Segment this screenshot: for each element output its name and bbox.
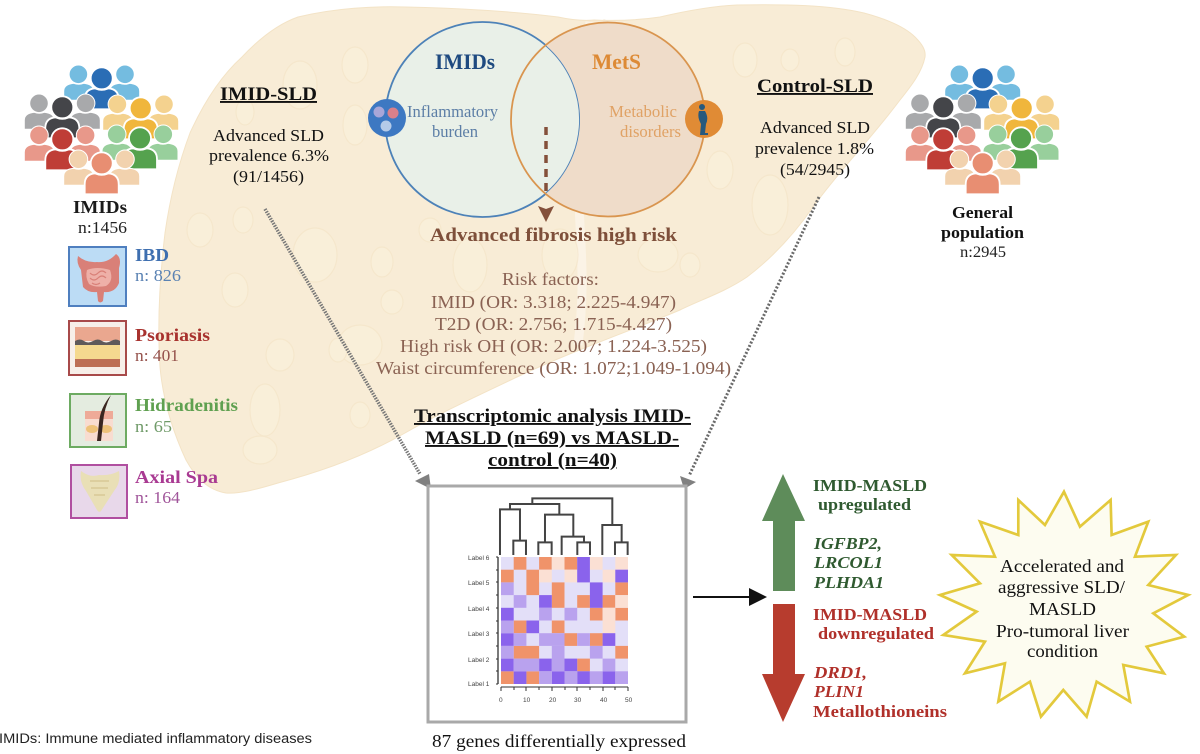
arrow: heatmap to gene regulation — [693, 588, 767, 606]
text: metabolic disorders: disorders — [620, 122, 681, 141]
arrow: upregulated — [762, 474, 805, 591]
text: conclusion: MASLD — [1029, 599, 1096, 619]
text: conclusion: aggressive SLD/ — [998, 577, 1125, 597]
text block: IMID-SLD — [209, 84, 329, 186]
chart: axis labels: Label 1 — [468, 681, 490, 688]
text block: Control-SLD: (54/2945) — [780, 160, 850, 179]
text block: IMID-SLD: (91/1456) — [233, 167, 304, 186]
text: inflammatory burden — [407, 102, 498, 141]
text block: Control-SLD: Advanced SLD — [760, 118, 870, 137]
text: metabolic disorders — [609, 102, 681, 141]
text block: IMID-SLD: IMID-SLD — [220, 84, 317, 105]
chart: axes — [496, 557, 628, 691]
icon: skin layers — [69, 321, 126, 375]
label: IMIDs count: IMIDs — [73, 197, 127, 217]
text: downregulated genes: downregulated — [818, 624, 935, 643]
text: conclusion: Pro-tumoral liver — [996, 621, 1129, 641]
text: downregulated genes: IMID-MASLD — [813, 605, 927, 624]
venn diagram — [368, 22, 723, 222]
arrow: IMID-SLD to heatmap — [265, 209, 431, 489]
chart: axis labels — [468, 555, 633, 704]
panel: Axial Spa — [71, 465, 218, 518]
liver background — [159, 5, 925, 493]
text: conclusion: condition — [1027, 641, 1098, 661]
text: upregulated genes: IMID-MASLD — [813, 476, 927, 495]
text block: risk factors — [376, 269, 731, 379]
chart: axis labels: Label 3 — [468, 631, 490, 638]
callout: star conclusion — [940, 492, 1188, 717]
text block: risk factors: High risk OH (OR: 2.007; 1.224-3.525) — [400, 336, 707, 357]
label: IMIDs count: n:1456 — [78, 218, 127, 237]
chart: axis labels: 20 — [549, 697, 557, 704]
text: metabolic disorders: Metabolic — [609, 102, 677, 121]
heading: transcriptomic analysis: control (n=40) — [488, 450, 617, 471]
arrow: Control-SLD to heatmap — [680, 197, 819, 489]
text block: IMID-SLD: Advanced SLD — [213, 126, 324, 145]
label: general population count: n:2945 — [960, 244, 1006, 261]
circle: IMIDs — [385, 22, 580, 217]
people group: IMIDs — [24, 65, 179, 194]
panel: Axial Spa: n: 164 — [135, 488, 181, 507]
panel: IBD — [69, 245, 181, 306]
chart: axis labels: 10 — [523, 697, 531, 704]
caption: genes differentially expressed: 87 genes differentially expressed — [432, 731, 686, 751]
chart: axis labels: 0 — [499, 697, 503, 704]
chart: axis labels: Label 5 — [468, 580, 490, 587]
text: upregulated genes: upregulated — [818, 495, 912, 514]
chart: axis labels: 50 — [625, 697, 633, 704]
text: inflammatory burden: Inflammatory — [407, 102, 498, 121]
people group: general population — [905, 65, 1060, 194]
panel: Hidradenitis — [70, 394, 238, 447]
heading: advanced fibrosis high risk: Advanced fibrosis high risk — [430, 225, 677, 246]
text: conclusion — [996, 556, 1129, 661]
text: downregulated genes: DRD1, — [813, 663, 867, 682]
text: upregulated genes: IGFBP2, — [813, 534, 882, 553]
label: general population count — [941, 203, 1025, 261]
text block: risk factors: Waist circumference (OR: 1.072;1.049-1.094) — [376, 358, 731, 379]
text: upregulated genes — [813, 476, 927, 592]
chart: dendrogram — [500, 498, 628, 555]
heading: transcriptomic analysis: MASLD (n=69) vs MASLD- — [425, 428, 679, 449]
panel: Psoriasis: Psoriasis — [135, 325, 210, 345]
text block: Control-SLD: Control-SLD — [757, 76, 873, 97]
panel: Hidradenitis: Hidradenitis — [135, 395, 238, 415]
chart: axis labels: 30 — [574, 697, 582, 704]
circle: MetS — [546, 22, 706, 217]
icon: hair follicle — [70, 394, 126, 447]
panel: heatmap box — [428, 486, 686, 722]
icon: intestine — [69, 247, 126, 306]
chart: axis labels: Label 6 — [468, 555, 490, 562]
text: downregulated genes — [813, 605, 947, 721]
panel: IBD: n: 826 — [135, 266, 181, 285]
label: general population count: General — [952, 203, 1013, 222]
arrow: downregulated — [762, 604, 805, 722]
panel: Hidradenitis: n: 65 — [135, 417, 172, 436]
icon: metabolic figure — [685, 100, 723, 138]
text: inflammatory burden: burden — [432, 122, 478, 141]
label: IMIDs count — [73, 197, 127, 237]
icon: sacrum — [71, 465, 127, 518]
chart: axis labels: 40 — [600, 697, 608, 704]
chart: heatmap cells — [501, 557, 628, 684]
chart: axis labels: Label 2 — [468, 657, 490, 664]
panel: Psoriasis: n: 401 — [135, 346, 179, 365]
text block: risk factors: T2D (OR: 2.756; 1.715-4.427) — [435, 314, 672, 335]
heading: transcriptomic analysis — [414, 406, 691, 471]
text: upregulated genes: LRCOL1 — [813, 553, 883, 572]
text block: Control-SLD — [755, 76, 874, 179]
text: downregulated genes: Metallothioneins — [813, 702, 947, 721]
text block: Control-SLD: prevalence 1.8% — [755, 139, 874, 158]
heading: transcriptomic analysis: Transcriptomic analysis IMID- — [414, 406, 691, 427]
heading: IMIDs: IMIDs — [435, 49, 495, 74]
text: downregulated genes: PLIN1 — [813, 682, 864, 701]
text block: IMID-SLD: prevalence 6.3% — [209, 146, 329, 165]
heading: MetS: MetS — [592, 49, 641, 74]
arrow: dashed to fibrosis risk — [538, 127, 554, 222]
chart: axis labels: Label 4 — [468, 606, 490, 613]
text block: risk factors: IMID (OR: 3.318; 2.225-4.947) — [431, 292, 676, 313]
icon: inflammatory cells — [368, 99, 406, 137]
panel: Psoriasis — [69, 321, 210, 375]
label: general population count: population — [941, 223, 1025, 242]
panel: Axial Spa: Axial Spa — [135, 467, 218, 487]
panel: IBD: IBD — [135, 245, 169, 265]
text block: risk factors: Risk factors: — [502, 269, 599, 289]
footnote: IMIDs: Immune mediated inflammatory diseases — [0, 731, 312, 746]
text: conclusion: Accelerated and — [1000, 556, 1124, 576]
text: upregulated genes: PLHDA1 — [813, 573, 884, 592]
